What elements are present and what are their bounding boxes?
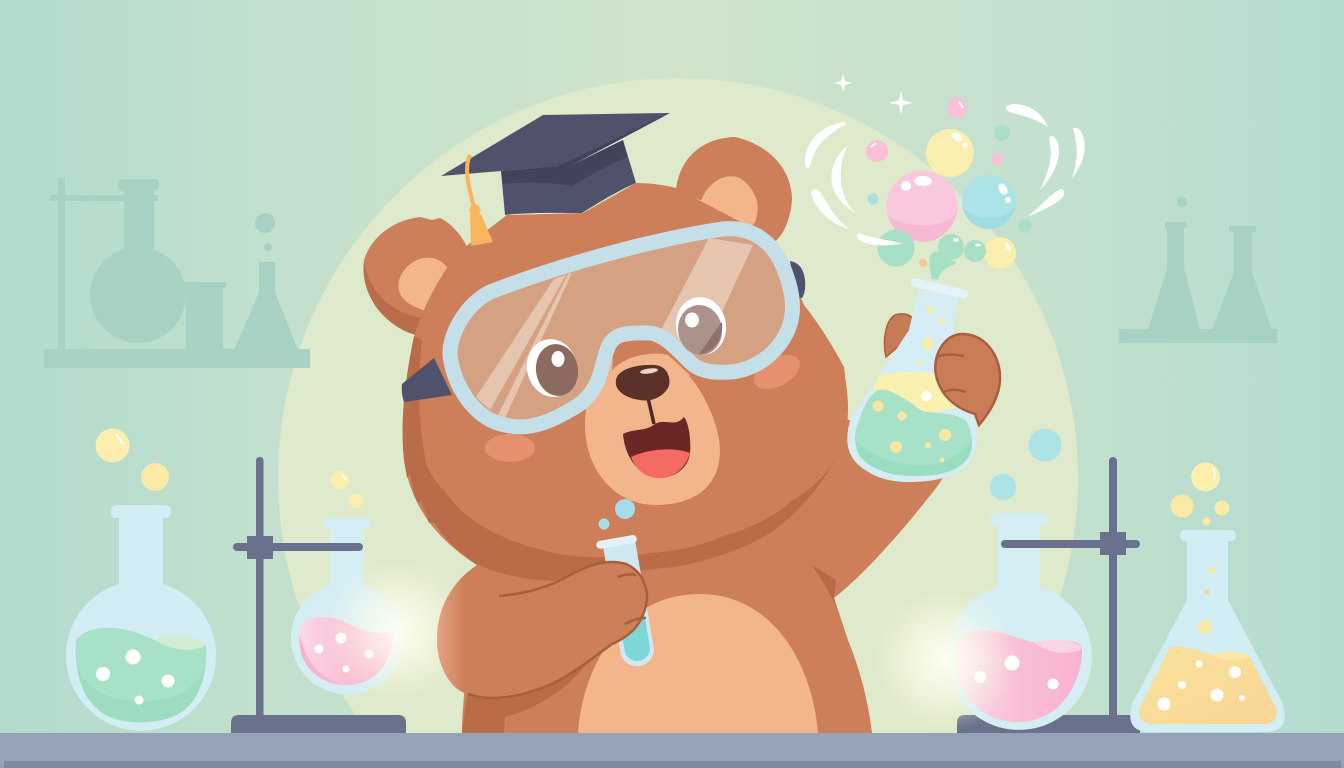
right ear (676, 137, 792, 245)
flask: left green (66, 505, 216, 731)
flask: left pink (291, 518, 403, 694)
bubbles above test tube (598, 499, 635, 530)
muzzle top and nose bridge under goggles (612, 341, 671, 375)
ring stand: left (231, 457, 406, 733)
large halo circle behind the bear (278, 78, 1078, 768)
ring stand left: arm and clamp (233, 536, 363, 559)
body shadow under left arm (462, 655, 592, 733)
mouth (623, 417, 690, 478)
graduation cap (441, 113, 670, 215)
flask in bear's raised hand (847, 277, 977, 482)
left ear (363, 217, 470, 336)
goggle strap: left (402, 358, 452, 402)
raised hand: palm over flask (935, 334, 1000, 425)
muzzle (585, 350, 720, 505)
flask: right yellow conical (1130, 530, 1285, 732)
left cheek (485, 434, 535, 462)
potion eruption: green bubbles and stream (878, 230, 986, 280)
left eye (522, 334, 582, 402)
glow: left (326, 558, 470, 702)
lens reflections (476, 275, 566, 410)
nose (616, 365, 669, 400)
cap tassel (467, 155, 493, 246)
head lower fur shadow (403, 336, 838, 581)
bubbles above left pink flask (331, 471, 363, 508)
right cheek (748, 348, 806, 396)
arm crease (812, 565, 841, 621)
bear head (403, 183, 848, 581)
goggles (450, 229, 793, 427)
goggle strap: right (790, 261, 805, 298)
flask: right pink (946, 513, 1092, 730)
bubbles above conical flask (1170, 462, 1230, 526)
silhouette: right lab equipment (1119, 197, 1277, 343)
left arm and hand (437, 562, 647, 698)
bubbles above raised flask (866, 98, 1062, 500)
raised hand: fingers behind flask (884, 314, 915, 357)
silhouette: left lab equipment (44, 178, 310, 368)
lab table (0, 733, 1344, 768)
nose line (648, 398, 654, 424)
ring stand right: arm and clamp (1001, 532, 1140, 555)
ring stand: right (957, 457, 1140, 733)
test tube (596, 534, 654, 666)
right eye (671, 293, 731, 359)
goggle frame (450, 229, 793, 427)
belly patch (578, 594, 818, 733)
bubbles above left flask (96, 428, 169, 491)
sparkles (834, 74, 913, 115)
white swirl lines (805, 104, 1085, 245)
bear body (462, 420, 975, 733)
glow: right (873, 588, 1017, 732)
